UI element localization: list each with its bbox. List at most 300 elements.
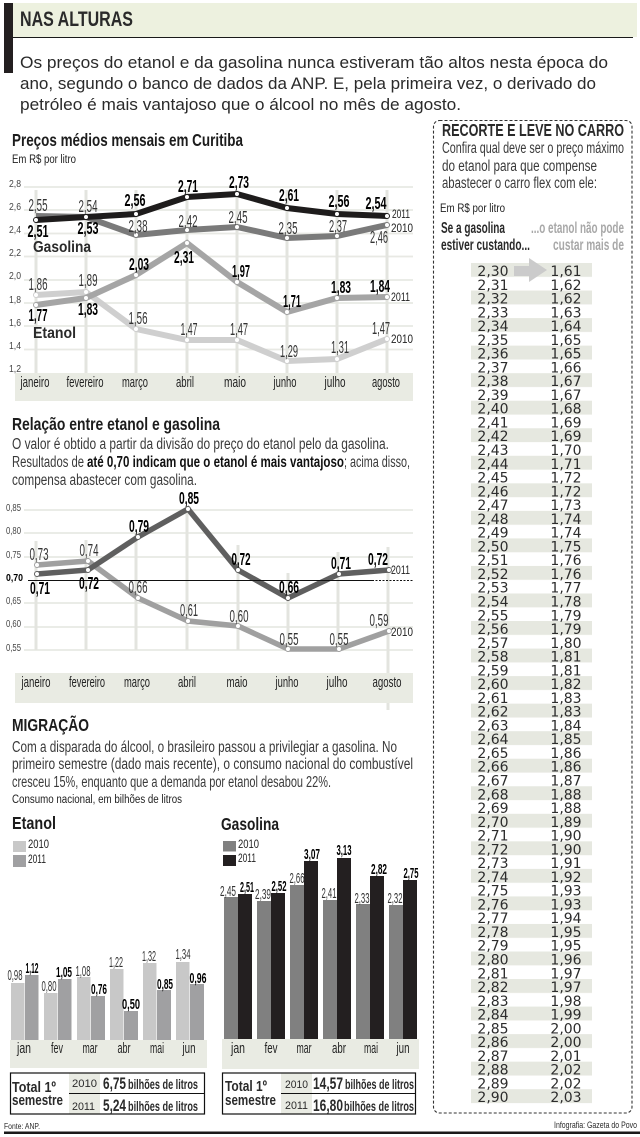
values: 0,98 <box>8 967 22 984</box>
column: ethanol max price: 1,67 <box>550 388 582 404</box>
months: agosto <box>372 675 402 691</box>
column: gasoline price: 2,87 <box>477 1049 509 1065</box>
explanatory text: ; acima disso, <box>344 454 410 471</box>
price values gasolina: 2,54 <box>366 193 387 213</box>
column: gasoline price: 2,40 <box>477 402 509 418</box>
column: gasoline price: 2,68 <box>477 787 509 803</box>
column: ethanol max price: 1,79 <box>550 608 582 624</box>
totals table: Total 1º <box>225 1078 267 1095</box>
column: ethanol max price: 1,93 <box>550 897 582 913</box>
column: ethanol max price: 1,98 <box>550 994 582 1010</box>
column: ethanol max price: 1,69 <box>550 415 582 431</box>
body: cresceu 15%, enquanto que a demanda por etanol desabou 22%. <box>12 774 331 791</box>
price values etanol: 1,71 <box>283 291 301 311</box>
heading: Preços médios mensais em Curitiba <box>12 130 243 150</box>
column: ethanol max price: 1,92 <box>550 870 582 886</box>
column: ethanol max price: 1,94 <box>550 911 582 927</box>
column: gasoline price: 2,51 <box>477 553 509 569</box>
legend <box>13 837 49 867</box>
months: fevereiro <box>69 675 105 691</box>
totals table <box>10 1073 204 1115</box>
column: gasoline price: 2,37 <box>477 360 509 376</box>
heading: Gasolina <box>221 814 279 834</box>
series labels: 2010 <box>391 221 413 235</box>
column: ethanol max price: 1,96 <box>550 953 582 969</box>
line: etanol 2010 <box>34 290 390 364</box>
column: gasoline price: 2,75 <box>477 884 509 900</box>
column: ethanol max price: 1,99 <box>550 1008 582 1024</box>
totals table: 16,80 <box>313 1096 343 1115</box>
months <box>20 375 400 391</box>
line: gasolina 2010 <box>36 216 390 240</box>
y axis: 1,8 <box>9 295 21 306</box>
ratio values: 0,79 <box>129 516 149 536</box>
column: ethanol max price: 1,74 <box>550 512 582 528</box>
column: ethanol max price: 1,95 <box>550 939 582 955</box>
column: gasoline price: 2,74 <box>477 870 509 886</box>
legend: 2010 <box>28 837 49 851</box>
totals table: 2011 <box>285 1100 308 1112</box>
column: ethanol max price: 1,62 <box>550 278 582 294</box>
explanatory text: até 0,70 indicam que o etanol é mais vantajoso <box>87 454 344 471</box>
footer: Fonte: ANP. <box>4 1122 40 1131</box>
price values gasolina: 2,53 <box>78 218 99 238</box>
column: gasoline price: 2,39 <box>477 388 509 404</box>
column headings: estiver custando... <box>441 237 530 254</box>
price values etanol: 2,03 <box>129 254 149 274</box>
column: gasoline price: 2,36 <box>477 347 509 363</box>
column headings <box>441 220 624 254</box>
values <box>220 842 418 907</box>
series labels <box>33 207 413 346</box>
body: primeiro semestre (dado mais recente), o consumo nacional do combustível <box>12 756 413 773</box>
panel: migracao text <box>12 714 413 806</box>
months: janeiro <box>20 375 50 391</box>
y axis: 0,60 <box>6 619 21 630</box>
values: 0,50 <box>122 996 140 1013</box>
column: gasoline price: 2,61 <box>477 691 509 707</box>
column: ethanol max price: 1,80 <box>550 636 582 652</box>
body: Com a disparada do álcool, o brasileiro passou a privilegiar a gasolina. No <box>12 739 397 756</box>
column: gasoline price: 2,88 <box>477 1063 509 1079</box>
price values etanol: 1,47 <box>372 318 390 338</box>
column: ethanol max price: 2,00 <box>550 1035 582 1051</box>
column: ethanol max price: 1,72 <box>550 471 582 487</box>
column: ethanol max price: 2,01 <box>550 1049 582 1065</box>
ratio values: 0,66 <box>279 577 299 597</box>
column: ethanol max price: 1,83 <box>550 691 582 707</box>
intro text: Os preços do etanol e da gasolina nunca estiveram tão altos nesta época do <box>20 54 608 72</box>
values: 0,96 <box>190 970 206 987</box>
column: gasoline price: 2,49 <box>477 526 509 542</box>
months: fev <box>51 1041 63 1057</box>
values: 1,05 <box>56 964 72 981</box>
column: ethanol max price: 1,63 <box>550 305 582 321</box>
panel: gasolina bars <box>220 814 419 1115</box>
column: gasoline price: 2,70 <box>477 815 509 831</box>
y axis: 2,8 <box>9 179 21 190</box>
months: jun <box>182 1041 196 1057</box>
title: NAS ALTURAS <box>20 8 133 31</box>
months <box>21 675 402 691</box>
price values etanol: 1,47 <box>230 319 248 339</box>
y axis <box>9 179 21 375</box>
y axis: 0,80 <box>6 526 21 537</box>
column: gasoline price: 2,50 <box>477 539 509 555</box>
price values etanol: 1,83 <box>78 299 98 319</box>
values: 2,45 <box>220 883 236 900</box>
column: ethanol max price: 1,72 <box>550 484 582 500</box>
body <box>12 739 413 791</box>
column: gasoline price: 2,65 <box>477 746 509 762</box>
column: gasoline price: 2,66 <box>477 760 509 776</box>
column: gasoline price: 2,78 <box>477 925 509 941</box>
months: junho <box>275 675 298 691</box>
legend: 2011 <box>28 852 46 866</box>
column: ethanol max price: 1,81 <box>550 650 582 666</box>
column: gasoline price: 2,77 <box>477 911 509 927</box>
column: ethanol max price: 1,93 <box>550 884 582 900</box>
panel: etanol bars <box>8 813 207 1115</box>
column: gasoline price: 2,30 <box>477 264 509 280</box>
column: ethanol max price: 1,82 <box>550 677 582 693</box>
column: gasoline price: 2,73 <box>477 856 509 872</box>
bars 2010 <box>224 885 403 1039</box>
ratio values: 0,55 <box>280 629 298 649</box>
price values etanol: 1,56 <box>128 308 148 328</box>
months: mai <box>150 1041 164 1057</box>
column: gasoline price: 2,45 <box>477 471 509 487</box>
intro text: ano, segundo o banco de dados da ANP. E, pela primeira vez, o derivado do <box>20 75 596 93</box>
ratio values: 0,61 <box>180 600 198 620</box>
column: ethanol max price: 1,85 <box>550 732 582 748</box>
series labels: 2011 <box>391 290 410 304</box>
column: gasoline price: 2,35 <box>477 333 509 349</box>
months: maio <box>224 375 246 391</box>
months: junho <box>273 375 296 391</box>
column: gasoline price: 2,82 <box>477 980 509 996</box>
price values gasolina: 2,71 <box>178 176 198 196</box>
price values gasolina: 2,38 <box>128 216 148 236</box>
totals table <box>222 1073 416 1115</box>
column: gasoline price: 2,79 <box>477 939 509 955</box>
y axis: 0,85 <box>6 503 21 514</box>
values: 2,41 <box>322 885 336 902</box>
ratio values: 0,85 <box>179 488 199 508</box>
price chart grid and band <box>15 187 413 401</box>
values: 0,85 <box>157 976 173 993</box>
column: ethanol max price: 2,02 <box>550 1063 582 1079</box>
ratio grid and band <box>15 508 413 710</box>
months: mar <box>82 1041 98 1057</box>
column: gasoline price: 2,32 <box>477 292 509 308</box>
values: 0,80 <box>42 978 56 995</box>
y axis: 0,55 <box>6 643 21 654</box>
totals table: bilhões de litros <box>345 1077 414 1092</box>
months: jun <box>396 1041 410 1057</box>
column: gasoline price: 2,64 <box>477 732 509 748</box>
ratio values: 0,72 <box>368 549 388 569</box>
y axis <box>6 503 23 654</box>
column: gasoline price: 2,81 <box>477 966 509 982</box>
column: gasoline price: 2,72 <box>477 842 509 858</box>
ratio values: 0,72 <box>79 573 99 593</box>
y axis: 2,6 <box>9 202 21 213</box>
ratio values: 2011 <box>391 563 410 577</box>
column: ethanol max price: 2,00 <box>550 1021 582 1037</box>
column: gasoline price: 2,53 <box>477 581 509 597</box>
totals table: semestre <box>12 1092 63 1109</box>
header <box>4 3 637 73</box>
column headings: Se a gasolina <box>441 220 505 237</box>
column: gasoline price: 2,54 <box>477 594 509 610</box>
column: gasoline price: 2,63 <box>477 718 509 734</box>
column: ethanol max price: 1,75 <box>550 539 582 555</box>
y axis: 1,4 <box>9 341 21 352</box>
months: fev <box>264 1041 278 1057</box>
column: ethanol max price: 1,86 <box>550 746 582 762</box>
totals table: Total 1º <box>12 1079 56 1096</box>
series labels: 2010 <box>391 332 413 346</box>
values: 3,13 <box>336 842 352 859</box>
column: ethanol max price: 1,70 <box>550 443 582 459</box>
months: março <box>122 375 148 391</box>
column: ethanol max price: 1,90 <box>550 842 582 858</box>
explanatory text: compensa abastecer com gasolina. <box>12 472 197 489</box>
values <box>8 946 206 1013</box>
column: gasoline price: 2,38 <box>477 374 509 390</box>
values: 2,32 <box>388 890 402 907</box>
column: gasoline price: 2,33 <box>477 305 509 321</box>
months: agosto <box>372 375 400 391</box>
y axis: 0,65 <box>6 596 21 607</box>
price values gasolina: 2,37 <box>329 216 347 236</box>
price values etanol: 1,89 <box>78 270 98 290</box>
panel: relacao <box>6 414 413 710</box>
values: 2,52 <box>272 878 286 895</box>
column: ethanol max price: 1,76 <box>550 567 582 583</box>
price values gasolina: 2,35 <box>278 218 298 238</box>
price values gasolina: 2,45 <box>228 207 248 227</box>
column: ethanol max price: 1,88 <box>550 787 582 803</box>
column: ethanol max price: 1,65 <box>550 333 582 349</box>
threshold line 0,70 <box>28 580 413 582</box>
column: gasoline price: 2,41 <box>477 415 509 431</box>
months <box>16 1041 195 1057</box>
column: ethanol max price: 1,66 <box>550 360 582 376</box>
y axis: 2,2 <box>9 248 21 259</box>
ratio values: 0,59 <box>370 610 388 630</box>
ratio values: 0,74 <box>80 540 99 560</box>
column: gasoline price: 2,55 <box>477 608 509 624</box>
column: ethanol max price: 1,83 <box>550 705 582 721</box>
price values etanol: 1,77 <box>28 305 48 325</box>
price values gasolina: 2,46 <box>370 227 388 247</box>
months: julho <box>326 675 348 691</box>
y axis: 1,2 <box>9 364 21 375</box>
column: gasoline price: 2,56 <box>477 622 509 638</box>
ratio values: 0,71 <box>30 578 50 598</box>
y axis: 2,0 <box>9 271 21 282</box>
legend <box>223 837 259 866</box>
price values gasolina <box>28 172 388 247</box>
legend: 2011 <box>238 851 256 865</box>
description <box>442 140 624 192</box>
column: gasoline price: 2,58 <box>477 650 509 666</box>
column: gasoline price: 2,85 <box>477 1021 509 1037</box>
bars 2011 <box>238 858 417 1039</box>
column: ethanol max price: 1,81 <box>550 663 582 679</box>
column: gasoline price: 2,43 <box>477 443 509 459</box>
band <box>222 1039 419 1069</box>
column: gasoline price: 2,44 <box>477 457 509 473</box>
totals table: 5,24 <box>103 1096 126 1115</box>
column: gasoline price: 2,84 <box>477 1008 509 1024</box>
explanatory text: Resultados de <box>12 454 84 471</box>
months: abr <box>118 1041 131 1057</box>
months: mai <box>364 1041 378 1057</box>
column: gasoline price: 2,76 <box>477 897 509 913</box>
column: ethanol max price: 1,74 <box>550 526 582 542</box>
totals table: semestre <box>225 1092 276 1109</box>
line: gasolina 2011 <box>34 192 390 222</box>
column: ethanol max price: 1,90 <box>550 829 582 845</box>
price values gasolina: 2,73 <box>229 172 249 192</box>
values: 2,33 <box>354 890 370 907</box>
column: ethanol max price: 1,69 <box>550 429 582 445</box>
months: julho <box>324 375 346 391</box>
column: ethanol max price: 1,65 <box>550 347 582 363</box>
column: ethanol max price: 1,79 <box>550 622 582 638</box>
price values gasolina: 2,42 <box>178 211 198 231</box>
column: gasoline price: 2,67 <box>477 773 509 789</box>
footer <box>4 1120 640 1134</box>
column: ethanol max price: 1,84 <box>550 718 582 734</box>
explanatory text: O valor é obtido a partir da divisão do preço do etanol pelo da gasolina. <box>12 436 389 453</box>
months: mar <box>296 1041 312 1057</box>
dashed cut-out frame <box>434 120 632 1113</box>
price values etanol: 1,83 <box>331 277 351 297</box>
months: março <box>124 675 150 691</box>
ratio values: 0,60 <box>230 606 249 626</box>
series labels: Etanol <box>33 325 76 342</box>
intro text: petróleo é mais vantajoso que o álcool no mês de agosto. <box>20 96 461 114</box>
column: ethanol max price: 1,97 <box>550 980 582 996</box>
values: 1,08 <box>76 963 90 980</box>
series labels: 2011 <box>392 207 410 221</box>
column: gasoline price: 2,80 <box>477 953 509 969</box>
line: relacao 2011 <box>34 506 392 600</box>
column: gasoline price: 2,59 <box>477 663 509 679</box>
price values etanol: 2,31 <box>174 247 194 267</box>
unit: Consumo nacional, em bilhões de litros <box>12 794 182 806</box>
values: 2,75 <box>404 865 418 882</box>
band <box>10 1040 207 1068</box>
totals table: 2010 <box>285 1079 308 1091</box>
heading: Relação entre etanol e gasolina <box>12 414 220 434</box>
column: ethanol max price: 1,87 <box>550 773 582 789</box>
ratio values: 2010 <box>391 625 413 639</box>
column: gasoline price: 2,52 <box>477 567 509 583</box>
price values etanol: 1,97 <box>232 261 250 281</box>
column: ethanol max price: 1,61 <box>550 264 582 280</box>
values: 1,12 <box>26 960 38 977</box>
months: jan <box>230 1041 245 1057</box>
explanatory text <box>12 436 410 489</box>
column: ethanol max price: 1,67 <box>550 374 582 390</box>
column: ethanol max price: 1,68 <box>550 402 582 418</box>
totals table: bilhões de litros <box>344 1099 414 1114</box>
values: 1,22 <box>109 954 123 971</box>
column: ethanol max price: 1,62 <box>550 292 582 308</box>
column: ethanol max price: 1,89 <box>550 815 582 831</box>
price values gasolina: 2,61 <box>279 185 299 205</box>
column: gasoline price: 2,48 <box>477 512 509 528</box>
months: janeiro <box>21 675 50 691</box>
totals table: 14,57 <box>313 1074 343 1093</box>
price values gasolina: 2,55 <box>28 195 48 215</box>
price values etanol: 1,84 <box>370 276 390 296</box>
y axis: 2,4 <box>9 225 21 236</box>
months: fevereiro <box>66 375 104 391</box>
column: ethanol max price: 2,02 <box>550 1076 582 1092</box>
price values etanol: 1,86 <box>28 274 48 294</box>
values: 1,34 <box>176 946 190 963</box>
legend: 2010 <box>238 837 259 851</box>
column: gasoline price: 2,83 <box>477 994 509 1010</box>
ratio values: 0,66 <box>128 577 148 597</box>
column: ethanol max price: 1,86 <box>550 760 582 776</box>
price values etanol: 1,31 <box>331 337 349 357</box>
column: gasoline price: 2,46 <box>477 484 509 500</box>
column: gasoline price: 2,34 <box>477 319 509 335</box>
heading: Etanol <box>12 813 56 833</box>
ratio values: 0,72 <box>232 549 251 569</box>
column: ethanol max price: 1,95 <box>550 925 582 941</box>
series labels: Gasolina <box>33 239 91 256</box>
totals table: bilhões de litros <box>128 1099 198 1114</box>
column: gasoline price: 2,71 <box>477 829 509 845</box>
ratio values: 0,73 <box>30 544 48 564</box>
ratio values: 0,71 <box>331 553 351 573</box>
values: 2,39 <box>255 886 271 903</box>
column: gasoline price: 2,62 <box>477 705 509 721</box>
price values etanol: 1,47 <box>180 319 198 339</box>
months: maio <box>226 675 248 691</box>
values: 0,76 <box>91 981 107 998</box>
column: gasoline price: 2,90 <box>477 1090 509 1106</box>
table stripes <box>471 263 592 1104</box>
months: abril <box>176 375 194 391</box>
column: gasoline price: 2,57 <box>477 636 509 652</box>
totals table: bilhões de litros <box>128 1077 198 1092</box>
totals table: 2010 <box>72 1078 97 1090</box>
column: ethanol max price: 1,88 <box>550 801 582 817</box>
price values gasolina: 2,51 <box>28 221 49 241</box>
months: jan <box>16 1041 31 1057</box>
icon: arrow <box>514 258 547 282</box>
column: ethanol max price: 1,97 <box>550 966 582 982</box>
unit: Em R$ por litro <box>12 154 76 166</box>
column: ethanol max price: 1,73 <box>550 498 582 514</box>
column: gasoline price: 2,42 <box>477 429 509 445</box>
ratio values <box>30 488 413 649</box>
y axis: 0,70 <box>6 573 23 584</box>
bars 2010 <box>11 962 190 1040</box>
values: 2,82 <box>371 861 387 878</box>
values: 1,32 <box>142 948 156 965</box>
panel: recorte e leve no carro <box>434 120 632 1113</box>
